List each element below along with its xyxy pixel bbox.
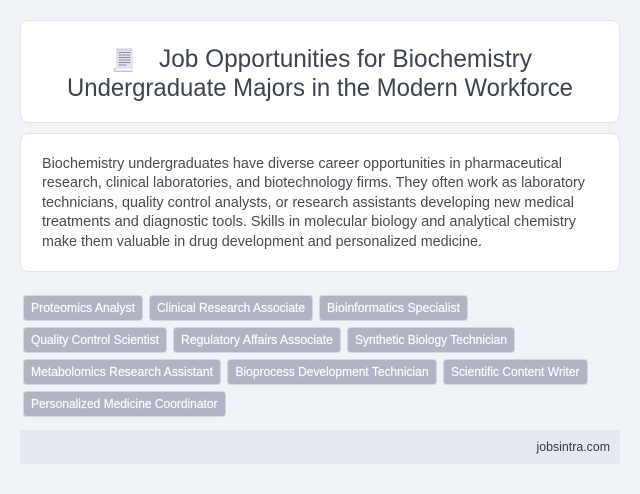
tag: Bioinformatics Specialist [320, 296, 468, 320]
panel: title card [20, 20, 620, 122]
tag: Synthetic Biology Technician [348, 328, 514, 352]
footer text: source: jobsintra.com [536, 440, 610, 454]
tag: Proteomics Analyst [24, 296, 142, 320]
tag list: job titles [24, 296, 588, 416]
title: Undergraduate Majors in the Modern Workforce [67, 74, 573, 102]
tag: Bioprocess Development Technician [228, 360, 436, 384]
icon: document scroll [114, 48, 134, 72]
tag: Clinical Research Associate: Clinical Research Associate [157, 301, 305, 315]
text block: description [42, 155, 585, 250]
panel: description card [20, 134, 620, 272]
tag: Bioprocess Development Technician: Bioprocess Development Technician [236, 365, 429, 379]
tag: Personalized Medicine Coordinator: Personalized Medicine Coordinator [31, 397, 218, 411]
text block: description: research, clinical laboratories, and biotechnology firms. They often work as laboratory [42, 174, 585, 191]
footer bar [20, 430, 620, 464]
tag: Bioinformatics Specialist: Bioinformatics Specialist [327, 301, 461, 315]
tag: Scientific Content Writer [444, 360, 588, 384]
tag: Regulatory Affairs Associate: Regulatory Affairs Associate [181, 333, 333, 347]
tag: Scientific Content Writer: Scientific Content Writer [451, 365, 580, 379]
text block: description: Biochemistry undergraduates have diverse career opportunities in pharmaceutical [42, 155, 562, 172]
tag: Personalized Medicine Coordinator [24, 392, 226, 416]
title: Job Opportunities for Biochemistry [159, 45, 532, 73]
text block: description: treatments and diagnostic tools. Skills in molecular biology and analytical chemistry [42, 213, 576, 230]
tag: Synthetic Biology Technician: Synthetic Biology Technician [355, 333, 507, 347]
tag: Metabolomics Research Assistant [24, 360, 220, 384]
tag: Clinical Research Associate [150, 296, 312, 320]
tag: Quality Control Scientist [24, 328, 166, 352]
tag: Regulatory Affairs Associate [174, 328, 340, 352]
text block: description: technicians, quality control analysts, or research assistants developing new medical [42, 194, 574, 211]
title [67, 45, 573, 102]
tag: Metabolomics Research Assistant: Metabolomics Research Assistant [31, 365, 213, 379]
text block: description: make them valuable in drug development and personalized medicine. [42, 233, 482, 250]
tag: Proteomics Analyst: Proteomics Analyst [31, 301, 136, 315]
tag: Quality Control Scientist: Quality Control Scientist [31, 333, 160, 347]
